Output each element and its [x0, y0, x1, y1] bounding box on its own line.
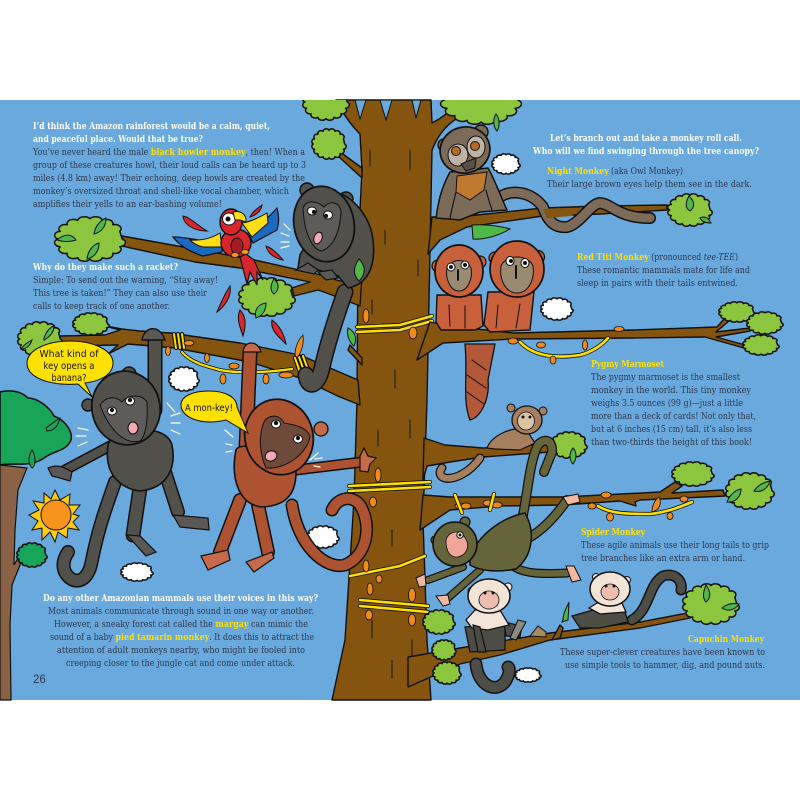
speech bubble: joke answer [181, 391, 248, 433]
top tree canopy clusters [302, 100, 522, 179]
red titi monkeys branch and vine [417, 302, 783, 364]
speech bubble: joke answer: A mon-key! [185, 403, 233, 414]
text block: spider monkey: Spider Monkey [581, 527, 645, 538]
night monkey [435, 121, 650, 227]
upper left branch with foliage [55, 217, 362, 318]
text block: howler intro: I’d think the Amazon rainforest would be a calm, quiet, [33, 121, 270, 132]
text block: night monkey: Night Monkey (aka Owl Monkey) [547, 166, 683, 177]
text block: pygmy marmoset: weighs 3.5 ounces (99 g)—just a little [591, 398, 743, 409]
page number: 26 [33, 674, 46, 686]
text block: why the racket [32, 262, 218, 312]
pygmy marmoset branch [423, 432, 587, 480]
text block: why the racket: calls to keep track of one another. [33, 301, 170, 312]
capuchin monkey right [572, 572, 681, 628]
text block: why the racket: Why do they make such a racket? [32, 262, 178, 273]
text block: howler intro: monkey’s oversized throat and shell-like vocal chamber, which [33, 186, 289, 197]
text block: pygmy marmoset [591, 359, 756, 448]
text block: howler intro: amplifies their yells to an ear-bashing volume! [33, 199, 222, 210]
falling red leaves [183, 205, 286, 344]
text block: capuchin monkey: use simple tools to hammer, dig, and pound nuts. [565, 660, 765, 671]
text block: night monkey: Their large brown eyes help them see in the dark. [547, 179, 752, 190]
red howler monkey hanging [201, 343, 376, 572]
speech bubble: joke question: key opens a [44, 361, 94, 372]
speech bubble: joke question: What kind of [40, 349, 99, 360]
text block: spider monkey: These agile animals use their long tails to grip [581, 540, 769, 551]
capuchin monkey left [465, 579, 526, 687]
left small tree [0, 391, 71, 700]
black howler monkey hanging [48, 329, 209, 581]
text block: pygmy marmoset: Pygmy Marmoset [591, 359, 665, 370]
text block: red titi monkey: sleep in pairs with their tails entwined. [577, 278, 738, 289]
text block: night monkey [547, 166, 752, 190]
text block: roll call heading: Let’s branch out and take a monkey roll call. [550, 133, 742, 144]
capuchin branch and foliage [408, 584, 739, 687]
text block: pygmy marmoset: The pygmy marmoset is the smallest [591, 372, 740, 383]
lower left branch with vine [18, 313, 362, 405]
text block: spider monkey [581, 527, 769, 564]
text block: howler intro: and peaceful place. Would that be true? [33, 134, 203, 145]
text block: roll call heading: Who will we find swinging through the tree canopy? [532, 146, 759, 157]
parrot [173, 208, 279, 285]
text block: other Amazonian mammals [43, 593, 318, 669]
text block: roll call heading [532, 133, 759, 157]
text block: other Amazonian mammals: However, a sneaky forest cat called the margay can mimic the [54, 619, 308, 630]
text block: howler intro [32, 121, 306, 210]
text block: red titi monkey [577, 252, 750, 289]
text block: capuchin monkey: These super-clever creatures have been known to [560, 647, 765, 658]
text block: howler intro: You’ve never heard the male black howler monkey, then! When a [32, 147, 305, 158]
text block: other Amazonian mammals: Most animals communicate through sound in one way or another. [48, 606, 314, 617]
text block: capuchin monkey: Capuchin Monkey [688, 634, 764, 645]
spider monkey branch and vine [420, 462, 774, 530]
text block: pygmy marmoset: monkey in the world. This tiny monkey [591, 385, 752, 396]
text block: pygmy marmoset: more than a deck of cards! Not only that, [591, 411, 756, 422]
icon: sun [29, 490, 80, 542]
text block: why the racket: Simple: To send out the warning, “Stay away! [33, 275, 218, 286]
text block: pygmy marmoset: than two-thirds the height of this book! [591, 437, 752, 448]
text block: spider monkey: tree branches like an extra arm or hand. [581, 553, 745, 564]
black howler monkey on top branch [281, 181, 374, 384]
text block: howler intro: miles (4.8 km) away! Their echoing, deep howls are created by the [33, 173, 305, 184]
text block: howler intro: group of these creatures howl, their loud calls can be heard up to 3 [33, 160, 306, 171]
text block: other Amazonian mammals: sound of a baby pied tamarin monkey. It does this to attract the [50, 632, 314, 643]
spider monkey [416, 441, 581, 606]
text block: why the racket: This tree is taken!” They can also use their [33, 288, 207, 299]
text block: other Amazonian mammals: attention of adult monkeys nearby, who might be fooled into [57, 645, 305, 656]
text block: other Amazonian mammals: Do any other Amazonian mammals use their voices in this way? [43, 593, 318, 604]
pygmy marmoset monkey [440, 404, 547, 478]
text block: capuchin monkey [560, 634, 765, 671]
speech bubble: joke question: banana? [52, 373, 86, 384]
tree trunk [332, 100, 464, 700]
blue sky panel [0, 100, 800, 700]
text block: red titi monkey: These romantic mammals mate for life and [577, 265, 750, 276]
red titi monkeys [432, 241, 544, 420]
text block: other Amazonian mammals: creeping closer to the jungle cat and come under attack. [66, 658, 295, 669]
night monkey branch [428, 194, 712, 254]
text block: pygmy marmoset: but at 6 inches (15 cm) tall, it’s also less [591, 424, 752, 435]
speech bubble: joke question [27, 341, 113, 397]
ropes tied around trunk [349, 309, 432, 626]
clouds [121, 154, 573, 682]
text block: red titi monkey: Red Titi Monkey (pronounced tee-TEE) [577, 252, 738, 263]
